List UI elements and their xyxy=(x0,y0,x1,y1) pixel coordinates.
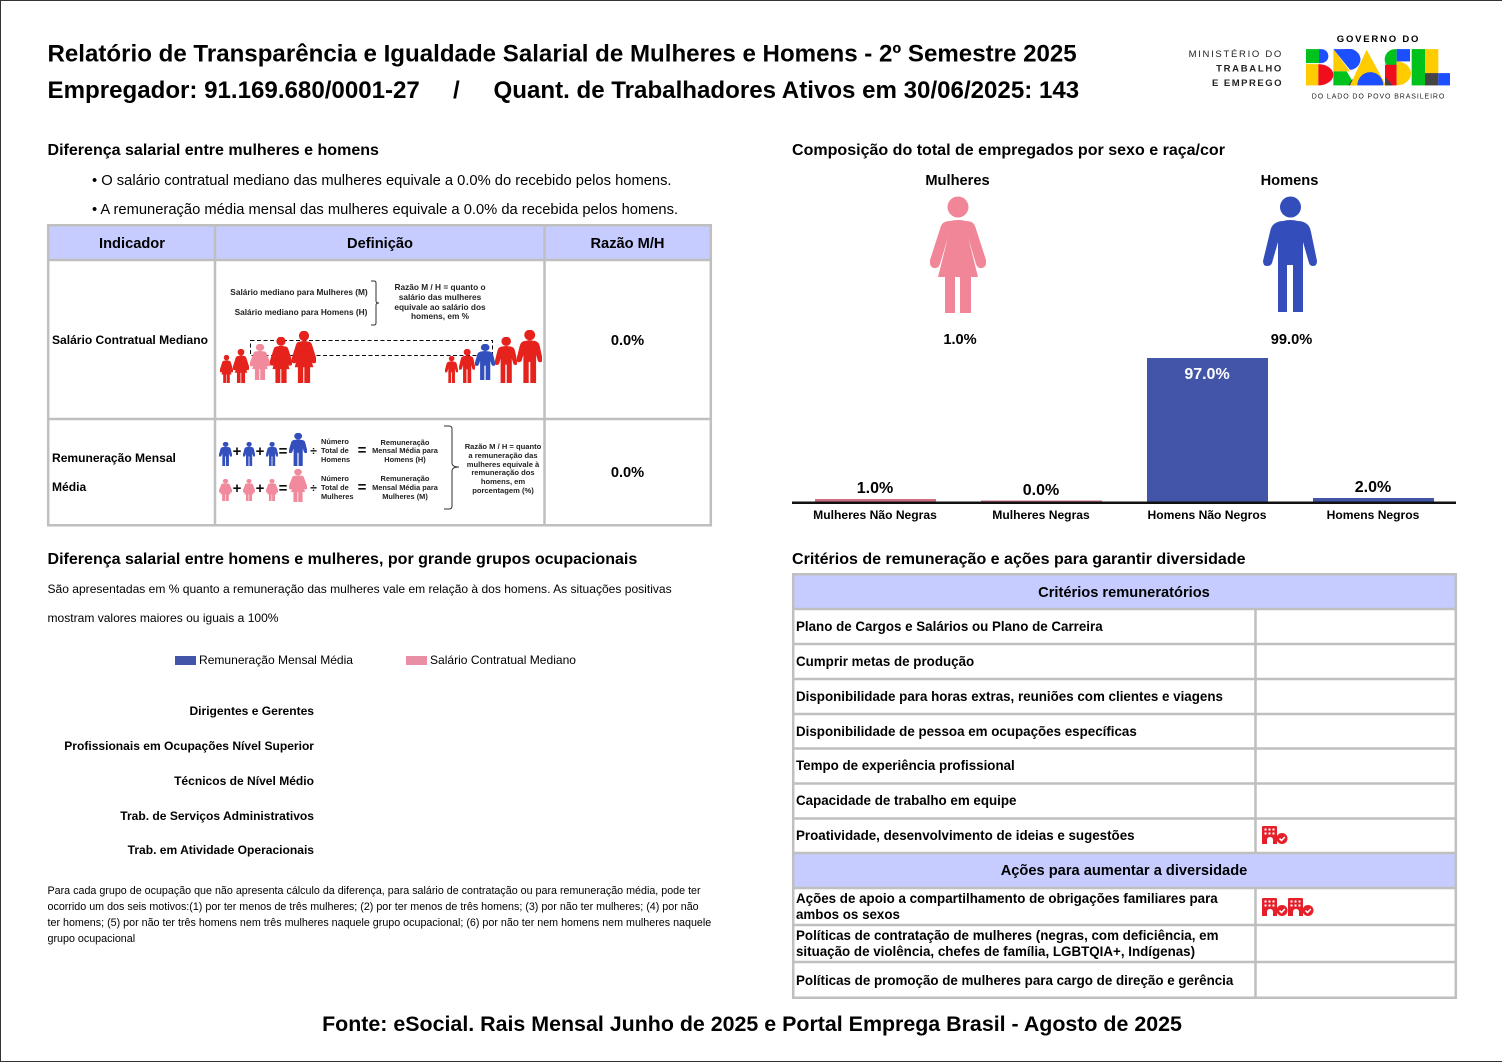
table heading: ações: Ações para aumentar a diversidade xyxy=(1001,863,1247,879)
diagram: remuneração média: = xyxy=(279,443,288,460)
footnote: grupo ocupacional xyxy=(48,933,135,945)
text block: explanation: mostram valores maiores ou iguais a 100% xyxy=(48,611,279,625)
chart: race bar chart xyxy=(792,358,1456,522)
row: remuneração mensal média: Média xyxy=(52,480,86,494)
chart: occupational categories: Trab. de Serviços Administrativos xyxy=(120,809,314,823)
logo: Governo do Brasil xyxy=(1306,34,1450,100)
footnote xyxy=(48,885,711,945)
row: salário contratual mediano: 0.0% xyxy=(611,333,644,349)
title: Quant. de Trabalhadores Ativos em 30/06/2025: 143 xyxy=(494,77,1079,104)
chart: race bar chart: Homens Negros xyxy=(1327,508,1420,522)
chart: race bar chart: 0.0% xyxy=(1023,482,1059,499)
chart: occupational categories: Profissionais em Ocupações Nível Superior xyxy=(64,739,314,753)
bullet text block xyxy=(92,173,678,218)
source footer: Fonte: eSocial. Rais Mensal Junho de 2025 e Portal Emprega Brasil - Agosto de 2025 xyxy=(322,1012,1182,1036)
icon: company check xyxy=(1262,826,1288,844)
diagram: salário mediano: salário das mulheres xyxy=(399,292,482,302)
logo: Governo do Brasil: DO LADO DO POVO BRASILEIRO xyxy=(1312,94,1445,100)
diagram: remuneração média: ÷ xyxy=(310,444,317,458)
diagram: salário mediano: Salário mediano para Mulheres (M) xyxy=(230,287,368,297)
criteria rows: Cumprir metas de produção xyxy=(796,654,974,669)
panel: indicator table xyxy=(48,225,711,525)
diagram: remuneração média xyxy=(219,426,542,509)
diagram: remuneração média: Total de xyxy=(321,483,349,492)
diagram: remuneração média: + xyxy=(233,480,242,497)
action rows: ambos os sexos xyxy=(796,907,900,922)
title: Empregador: 91.169.680/0001-27 xyxy=(48,77,420,104)
bullet text block: • O salário contratual mediano das mulheres equivale a 0.0% do recebido pelos homens. xyxy=(92,173,672,189)
heading: composição: Composição do total de empregados por sexo e raça/cor xyxy=(792,141,1225,159)
diagram: salário mediano xyxy=(220,281,542,383)
legend: Salário Contratual Mediano xyxy=(430,653,576,667)
row: remuneração mensal média: Remuneração Mensal xyxy=(52,451,176,465)
icon: men row xyxy=(445,330,542,383)
table header: Razão M/H xyxy=(590,236,665,252)
criteria rows: Disponibilidade de pessoa em ocupações específicas xyxy=(796,724,1137,739)
chart: occupational categories: Dirigentes e Gerentes xyxy=(189,704,314,718)
diagram: remuneração média: a remuneração das xyxy=(468,451,538,460)
text block: explanation: São apresentadas em % quanto a remuneração das mulheres vale em relação à dos homens. As situações positivas xyxy=(48,582,672,596)
chart: occupational categories: Trab. em Atividade Operacionais xyxy=(128,843,314,857)
table header: Indicador xyxy=(99,236,165,252)
criteria rows: Capacidade de trabalho em equipe xyxy=(796,793,1016,808)
diagram: remuneração média: ÷ xyxy=(310,481,317,495)
diagram: salário mediano: Razão M / H = quanto o xyxy=(394,282,486,292)
action rows: situação de violência, chefes de família, LGBTQIA+, Indígenas) xyxy=(796,944,1195,959)
chart: race bar chart: 97.0% xyxy=(1184,366,1230,383)
criteria rows: Plano de Cargos e Salários ou Plano de Carreira xyxy=(796,619,1103,634)
chart: occupational categories xyxy=(64,704,314,857)
diagram: remuneração média: Mensal Média para xyxy=(372,483,439,492)
heading: occupational groups: Diferença salarial entre homens e mulheres, por grande grupos ocupacionais xyxy=(48,550,637,568)
diagram: remuneração média: Mulheres xyxy=(321,492,353,501)
logo: Ministério do Trabalho e Emprego: E EMPREGO xyxy=(1212,78,1283,89)
chart: race bar chart: Mulheres Negras xyxy=(992,508,1090,522)
logo: Ministério do Trabalho e Emprego xyxy=(1189,49,1283,89)
icon: woman xyxy=(930,196,986,313)
diagram: salário mediano: equivale ao salário dos xyxy=(394,302,486,312)
diagram: remuneração média: remuneração dos xyxy=(471,468,535,477)
criteria rows: Disponibilidade para horas extras, reuniões com clientes e viagens xyxy=(796,689,1223,704)
legend: Remuneração Mensal Média xyxy=(199,653,353,667)
diagram: remuneração média: homens, em xyxy=(481,477,525,486)
action rows xyxy=(796,891,1234,988)
row: remuneração mensal média: 0.0% xyxy=(611,465,644,481)
criteria rows: Tempo de experiência profissional xyxy=(796,758,1015,773)
diagram: remuneração média: Total de xyxy=(321,446,349,455)
icon: men sum xyxy=(219,433,307,466)
chart: sex pictogram: Mulheres xyxy=(925,173,990,189)
chart: sex pictogram: 99.0% xyxy=(1271,332,1312,348)
logo: Ministério do Trabalho e Emprego: MINISTÉRIO DO xyxy=(1189,49,1283,60)
diagram: remuneração média: + xyxy=(256,480,265,497)
chart: race bar chart: 1.0% xyxy=(857,480,893,497)
criteria rows xyxy=(796,619,1223,843)
icon: women sum xyxy=(219,469,307,502)
icon: man xyxy=(1263,196,1317,312)
diagram: remuneração média: Número xyxy=(321,474,349,483)
legend xyxy=(175,653,576,667)
chart: race bar chart: 2.0% xyxy=(1355,479,1391,496)
chart: sex pictogram: Homens xyxy=(1261,173,1318,189)
chart: race bar chart: Homens Não Negros xyxy=(1148,508,1267,522)
chart: sex pictogram: 1.0% xyxy=(943,332,977,348)
diagram: remuneração média: Mensal Média para xyxy=(372,446,439,455)
footnote: ocorrido um dos seis motivos:(1) por ter menos de três mulheres; (2) por ter menos de três homens; (3) por não ter mulheres; (4) por não xyxy=(48,901,699,913)
icon: women row xyxy=(220,331,316,383)
diagram: remuneração média: Mulheres (M) xyxy=(382,492,428,501)
bullet text block: • A remuneração média mensal das mulheres equivale a 0.0% da recebida pelos homens. xyxy=(92,202,678,218)
action rows: Ações de apoio a compartilhamento de obrigações familiares para xyxy=(796,891,1218,906)
diagram: remuneração média: Razão M / H = quanto xyxy=(465,442,542,451)
chart: sex pictogram xyxy=(925,173,1318,348)
diagram: remuneração média: + xyxy=(256,443,265,460)
logo: Ministério do Trabalho e Emprego: TRABALHO xyxy=(1216,64,1283,74)
diagram: remuneração média: mulheres equivale à xyxy=(467,460,540,469)
row: salário contratual mediano xyxy=(52,333,644,349)
chart: occupational categories: Técnicos de Nível Médio xyxy=(174,774,314,788)
diagram: remuneração média: = xyxy=(358,479,367,496)
title xyxy=(48,40,1079,104)
title: Relatório de Transparência e Igualdade Salarial de Mulheres e Homens - 2º Semestre 2025 xyxy=(48,40,1077,68)
table heading: critérios remuneratórios: Critérios remuneratórios xyxy=(1038,585,1210,601)
panel: diferença salarial heading: Diferença salarial entre mulheres e homens xyxy=(48,141,379,159)
diagram: remuneração média: = xyxy=(358,442,367,459)
diagram: remuneração média: Remuneração xyxy=(381,438,430,447)
diagram: remuneração média: Homens xyxy=(321,455,350,464)
diagram: salário mediano: Salário mediano para Homens (H) xyxy=(235,307,368,317)
chart: race bar chart: Mulheres Não Negras xyxy=(813,508,937,522)
footnote: ter homens; (5) por não ter três homens nem três mulheres naquele grupo ocupacional; (6) por não ter nem homens nem mulheres naquele xyxy=(48,917,711,929)
diagram: remuneração média: = xyxy=(279,480,288,497)
diagram: remuneração média: Número xyxy=(321,437,349,446)
diagram: salário mediano: homens, em % xyxy=(411,311,470,321)
diagram: remuneração média: Remuneração xyxy=(381,474,430,483)
logo: Governo do Brasil: GOVERNO DO xyxy=(1337,34,1420,45)
row: remuneração mensal média xyxy=(52,451,644,494)
title: / xyxy=(453,77,460,104)
table header xyxy=(99,236,665,252)
footnote: Para cada grupo de ocupação que não apresenta cálculo da diferença, para salário de contratação ou para remuneração média, pode ter xyxy=(48,885,701,897)
text block: explanation xyxy=(48,582,672,625)
row: salário contratual mediano: Salário Contratual Mediano xyxy=(52,333,208,347)
heading: critérios: Critérios de remuneração e ações para garantir diversidade xyxy=(792,550,1246,568)
action rows: Políticas de contratação de mulheres (negras, com deficiência, em xyxy=(796,928,1219,943)
action rows: Políticas de promoção de mulheres para cargo de direção e gerência xyxy=(796,973,1234,988)
panel: criteria table xyxy=(793,574,1456,998)
diagram: remuneração média: Homens (H) xyxy=(384,455,426,464)
table header: Definição xyxy=(347,236,413,252)
diagram: remuneração média: + xyxy=(233,443,242,460)
criteria rows: Proatividade, desenvolvimento de ideias e sugestões xyxy=(796,828,1135,843)
diagram: remuneração média: porcentagem (%) xyxy=(472,486,534,495)
icon: company check pair xyxy=(1262,898,1314,916)
